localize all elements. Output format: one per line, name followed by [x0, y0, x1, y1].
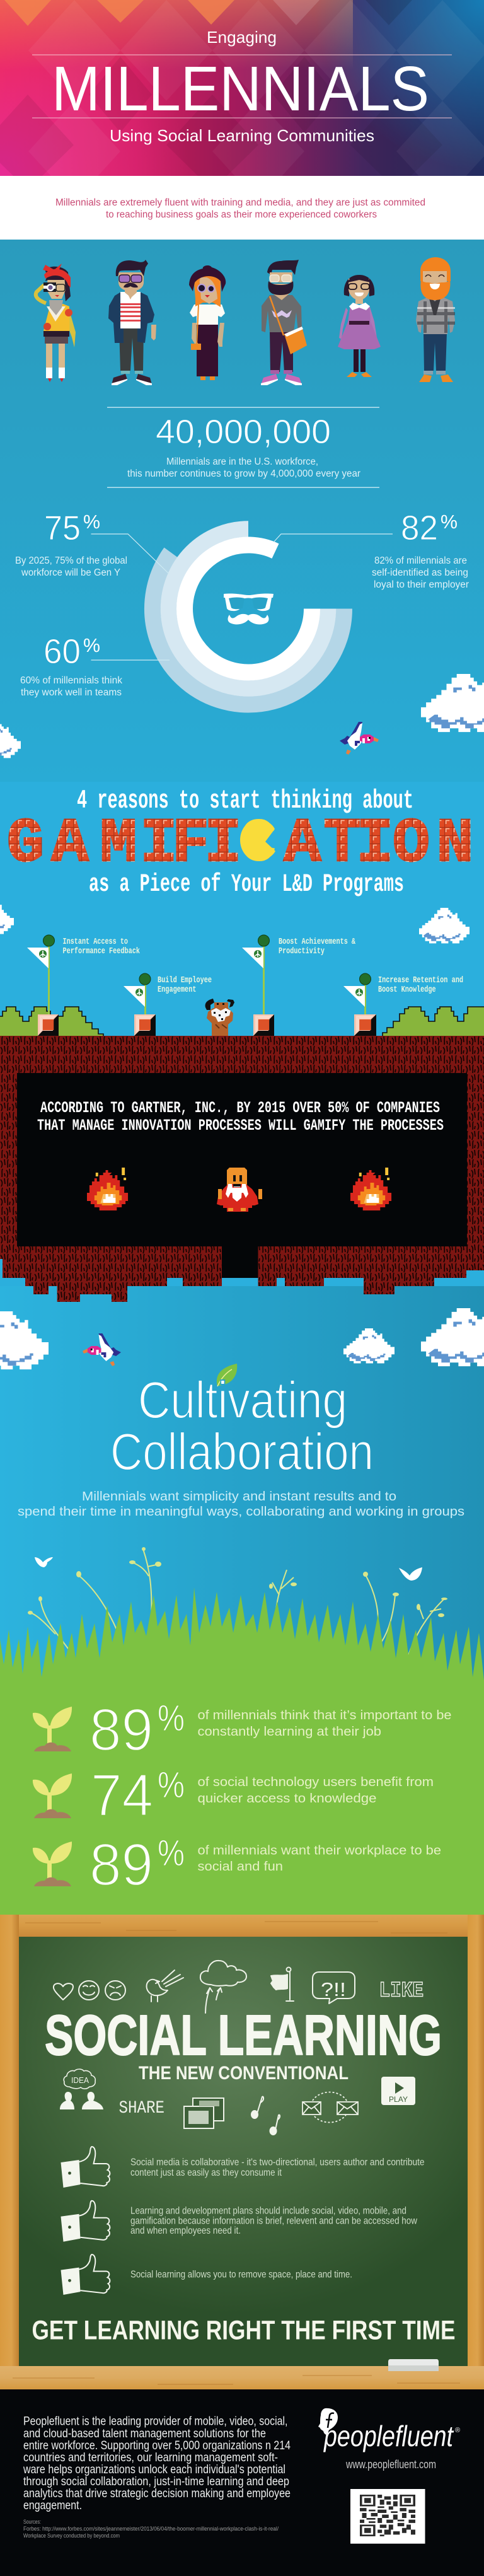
callout: 82%: loyal to their employer — [374, 579, 469, 590]
text: sources: Forbes: http://www.forbes.com/sites/jeannemeister/2013/06/04/the-boomer-millennial-workplace-clash-is-it-real/ — [23, 2526, 279, 2532]
stat row: 89% learning: constantly learning at their job — [198, 1724, 381, 1739]
stat: 40,000,000: this number continues to grow by 4,000,000 every year — [127, 468, 360, 479]
icon: idea people: IDEA — [71, 2075, 89, 2085]
illustration: six millennial characters — [36, 257, 455, 385]
text: company description: Peoplefluent is the leading provider of mobile, video, social, — [23, 2415, 287, 2428]
stat row: 74% knowledge: quicker access to knowledge — [198, 1791, 377, 1806]
icon: play button — [381, 2077, 415, 2105]
icon: pixel cloud right — [419, 908, 470, 943]
panel: header — [0, 0, 484, 202]
icon: flame right — [350, 1168, 391, 1210]
callout: 60% — [20, 632, 170, 698]
stat row: 89% learning — [33, 1697, 451, 1763]
reason 3: flag and label: Productivity — [279, 946, 325, 956]
text: sources: Sources: — [23, 2519, 41, 2525]
reason 4: flag and label — [343, 973, 463, 1036]
callout: 75%: workforce will be Gen Y — [21, 567, 120, 578]
logo: peoplefluent: peoplefluent — [323, 2420, 454, 2452]
item: development plans: gamification because information is brief, relevent and can be accessed how — [130, 2215, 417, 2227]
label: SHARE: SHARE — [118, 2099, 164, 2118]
stat row: 74% knowledge — [33, 1762, 434, 1829]
stat row: 89% social and fun: 89 — [89, 1831, 153, 1898]
callout: 82%: 82% of millennials are — [374, 555, 467, 566]
icon: play button: PLAY — [389, 2095, 408, 2104]
text: website: www.peoplefluent.com — [345, 2458, 436, 2471]
chalk icons row — [54, 1961, 355, 2013]
icon: music notes — [251, 2097, 280, 2135]
stat: 40,000,000 — [107, 407, 379, 488]
reason 2: flag and label — [124, 973, 212, 1036]
character: woman with hat and orange hair — [189, 265, 226, 380]
scene: bushes left — [0, 1007, 103, 1036]
callout: 82%: self-identified as being — [372, 567, 468, 578]
text: company description: ware helps organizations unlock each individual's potential — [23, 2463, 285, 2476]
icon: photos — [184, 2098, 224, 2128]
callout: 60%: 60 — [43, 632, 81, 671]
heading: Cultivating Collaboration: Cultivating — [138, 1371, 347, 1429]
item: collaborative: content just as easily as they consume it — [130, 2167, 282, 2178]
text: company description — [23, 2415, 291, 2512]
text: company description: through social collaboration, just-in-time learning and deep — [23, 2474, 289, 2488]
callout: 75%: % — [83, 511, 100, 533]
text: collaboration intro: spend their time in meaningful ways, collaborating and working in groups — [18, 1504, 464, 1519]
item: collaborative — [60, 2147, 425, 2188]
callout: 82%: % — [441, 511, 458, 533]
heading: Engaging: Engaging — [207, 28, 277, 47]
stat: 40,000,000: 40,000,000 — [156, 413, 331, 451]
icon: flag — [271, 1967, 294, 2001]
heading: Cultivating Collaboration — [110, 1371, 374, 1481]
callout: 75% — [15, 508, 170, 578]
reason 3: flag and label: Boost Achievements & — [279, 937, 355, 947]
icon: pixel cloud right — [421, 1308, 484, 1366]
callout: 60%: they work well in teams — [21, 687, 122, 698]
item: remove space: Social learning allows you to remove space, place and time. — [130, 2270, 352, 2280]
reason 2: flag and label: Build Employee — [158, 975, 212, 985]
text: company description: engagement. — [23, 2498, 82, 2512]
callout: 60%: 60% of millennials think — [20, 675, 122, 686]
text: collaboration intro — [18, 1489, 464, 1519]
item: collaborative: Social media is collaborative - it's two-directional, users author and contribute — [130, 2157, 425, 2168]
character: girl with camera — [36, 264, 76, 382]
stat row: 89% learning: of millennials think that it’s important to be — [198, 1708, 451, 1722]
icon: frown — [105, 1981, 125, 2000]
icon: bird — [147, 1970, 183, 2002]
panel: chalkboard — [0, 1915, 484, 2389]
label: LIKE: LIKE — [379, 1980, 424, 2004]
item: remove space — [60, 2254, 352, 2295]
stat row: 89% social and fun: social and fun — [198, 1859, 283, 1874]
stat: 40,000,000: Millennials are in the U.S. workforce, — [166, 456, 318, 467]
stat row: 89% learning: % — [158, 1698, 185, 1739]
scene: bushes right — [383, 1007, 484, 1036]
panel: grass field — [0, 1587, 484, 1915]
label: ?!!: ?!! — [321, 1978, 346, 2000]
icon: mail exchange — [302, 2092, 358, 2122]
subtitle: Using Social Learning Communities — [110, 126, 374, 145]
item: development plans: and when employees need it. — [130, 2225, 241, 2236]
title: GAMIFICATION brick lettering: GAMIFICATION — [7, 809, 473, 879]
character: man with sunglasses and moustache — [108, 260, 156, 385]
heading: Cultivating Collaboration: Collaboration — [110, 1422, 374, 1481]
stat row: 89% social and fun — [33, 1831, 441, 1898]
text: company description: countries and territories, our learning management soft- — [23, 2451, 278, 2464]
panel: intro text: to reaching business goals as their more experienced coworkers — [106, 209, 377, 220]
callout: 75%: By 2025, 75% of the global — [15, 555, 127, 566]
text: sources: Workplace Survey conducted by beyond.com — [23, 2532, 120, 2539]
callout: 60%: % — [83, 634, 100, 656]
icon: pixel duck — [340, 722, 379, 755]
panel: intro text: Millennials are extremely fluent with training and media, and they are just as commited — [55, 197, 425, 208]
text: company description: analytics that drive strategic decision making and employee — [23, 2486, 291, 2500]
text: collaboration intro: Millennials want simplicity and instant results and to — [82, 1489, 396, 1504]
stat row: 89% social and fun: % — [158, 1833, 185, 1874]
logo: peoplefluent — [318, 2408, 460, 2452]
chart: concentric radial percentages — [153, 529, 344, 705]
icon: pac-man — [240, 820, 275, 861]
icon: heart — [54, 1983, 73, 2000]
title: MILLENNIALS: MILLENNIALS — [52, 54, 429, 124]
icon: idea people — [60, 2069, 103, 2109]
reason 4: flag and label: Boost Knowledge — [378, 985, 436, 995]
icon: pixel cloud right — [421, 674, 484, 732]
subtitle: THE NEW CONVENTIONAL: THE NEW CONVENTIONAL — [139, 2063, 349, 2084]
callout: 82%: 82 — [401, 508, 438, 547]
character: woman in purple dress — [338, 275, 381, 377]
icon: glasses and moustache — [224, 593, 274, 624]
icon: pixel cloud left — [0, 722, 21, 758]
character: bearded man with book — [261, 260, 307, 385]
icon: QR code — [350, 2489, 425, 2544]
logo: peoplefluent: ® — [455, 2427, 460, 2434]
item: development plans — [60, 2201, 417, 2242]
stat row: 89% social and fun: of millennials want their workplace to be — [198, 1843, 441, 1857]
stat row: 74% knowledge: of social technology users benefit from — [198, 1775, 434, 1789]
icon: butterfly left — [35, 1557, 53, 1567]
icon: flame left — [87, 1168, 128, 1210]
icon: pixel cloud left — [0, 900, 14, 934]
icon: chalk eraser — [388, 2359, 439, 2371]
icon: duck hunt dog — [205, 999, 234, 1036]
scene: plant stems and butterflies — [28, 1547, 447, 1657]
reason 1: flag and label: Instant Access to — [63, 937, 128, 947]
icon: speech bubble — [313, 1972, 355, 2004]
reason 1: flag and label: Performance Feedback — [63, 946, 140, 956]
icon: smile — [79, 1981, 99, 2000]
panel: castle brick wall — [0, 1036, 484, 1302]
icon: pixel wizard — [217, 1168, 262, 1212]
icon: pixel cloud middle — [343, 1328, 395, 1363]
icon: cloud — [200, 1961, 246, 2013]
background: blue sky — [0, 240, 484, 1715]
reason 1: flag and label — [27, 935, 140, 1036]
icon: pixel duck mirrored — [83, 1333, 121, 1366]
stat row: 74% knowledge: % — [158, 1765, 185, 1806]
item: development plans: Learning and development plans should include social, video, mobile, and — [130, 2205, 406, 2216]
reason 2: flag and label: Engagement — [158, 985, 197, 995]
stat row: 74% knowledge: 74 — [91, 1762, 153, 1829]
icon: leaf — [217, 1364, 237, 1386]
callout: 75%: 75 — [44, 508, 81, 547]
panel: footer — [0, 2389, 484, 2576]
text: company description: and cloud-based talent management solutions for the — [23, 2427, 266, 2440]
callout: 82% — [274, 508, 469, 590]
panel: intro text — [0, 176, 484, 240]
text: sources — [23, 2519, 279, 2539]
stat row: 89% learning: 89 — [89, 1697, 153, 1763]
icon: pixel cloud left — [0, 1311, 49, 1369]
character: red-bearded man in plaid shirt — [416, 257, 455, 382]
reason 3: flag and label — [242, 935, 355, 1036]
text: company description: entire workforce. Supporting over 5,000 organizations n 214 — [23, 2439, 291, 2452]
quote: Gartner statement — [37, 1099, 444, 1135]
icon: butterfly right — [399, 1567, 422, 1581]
